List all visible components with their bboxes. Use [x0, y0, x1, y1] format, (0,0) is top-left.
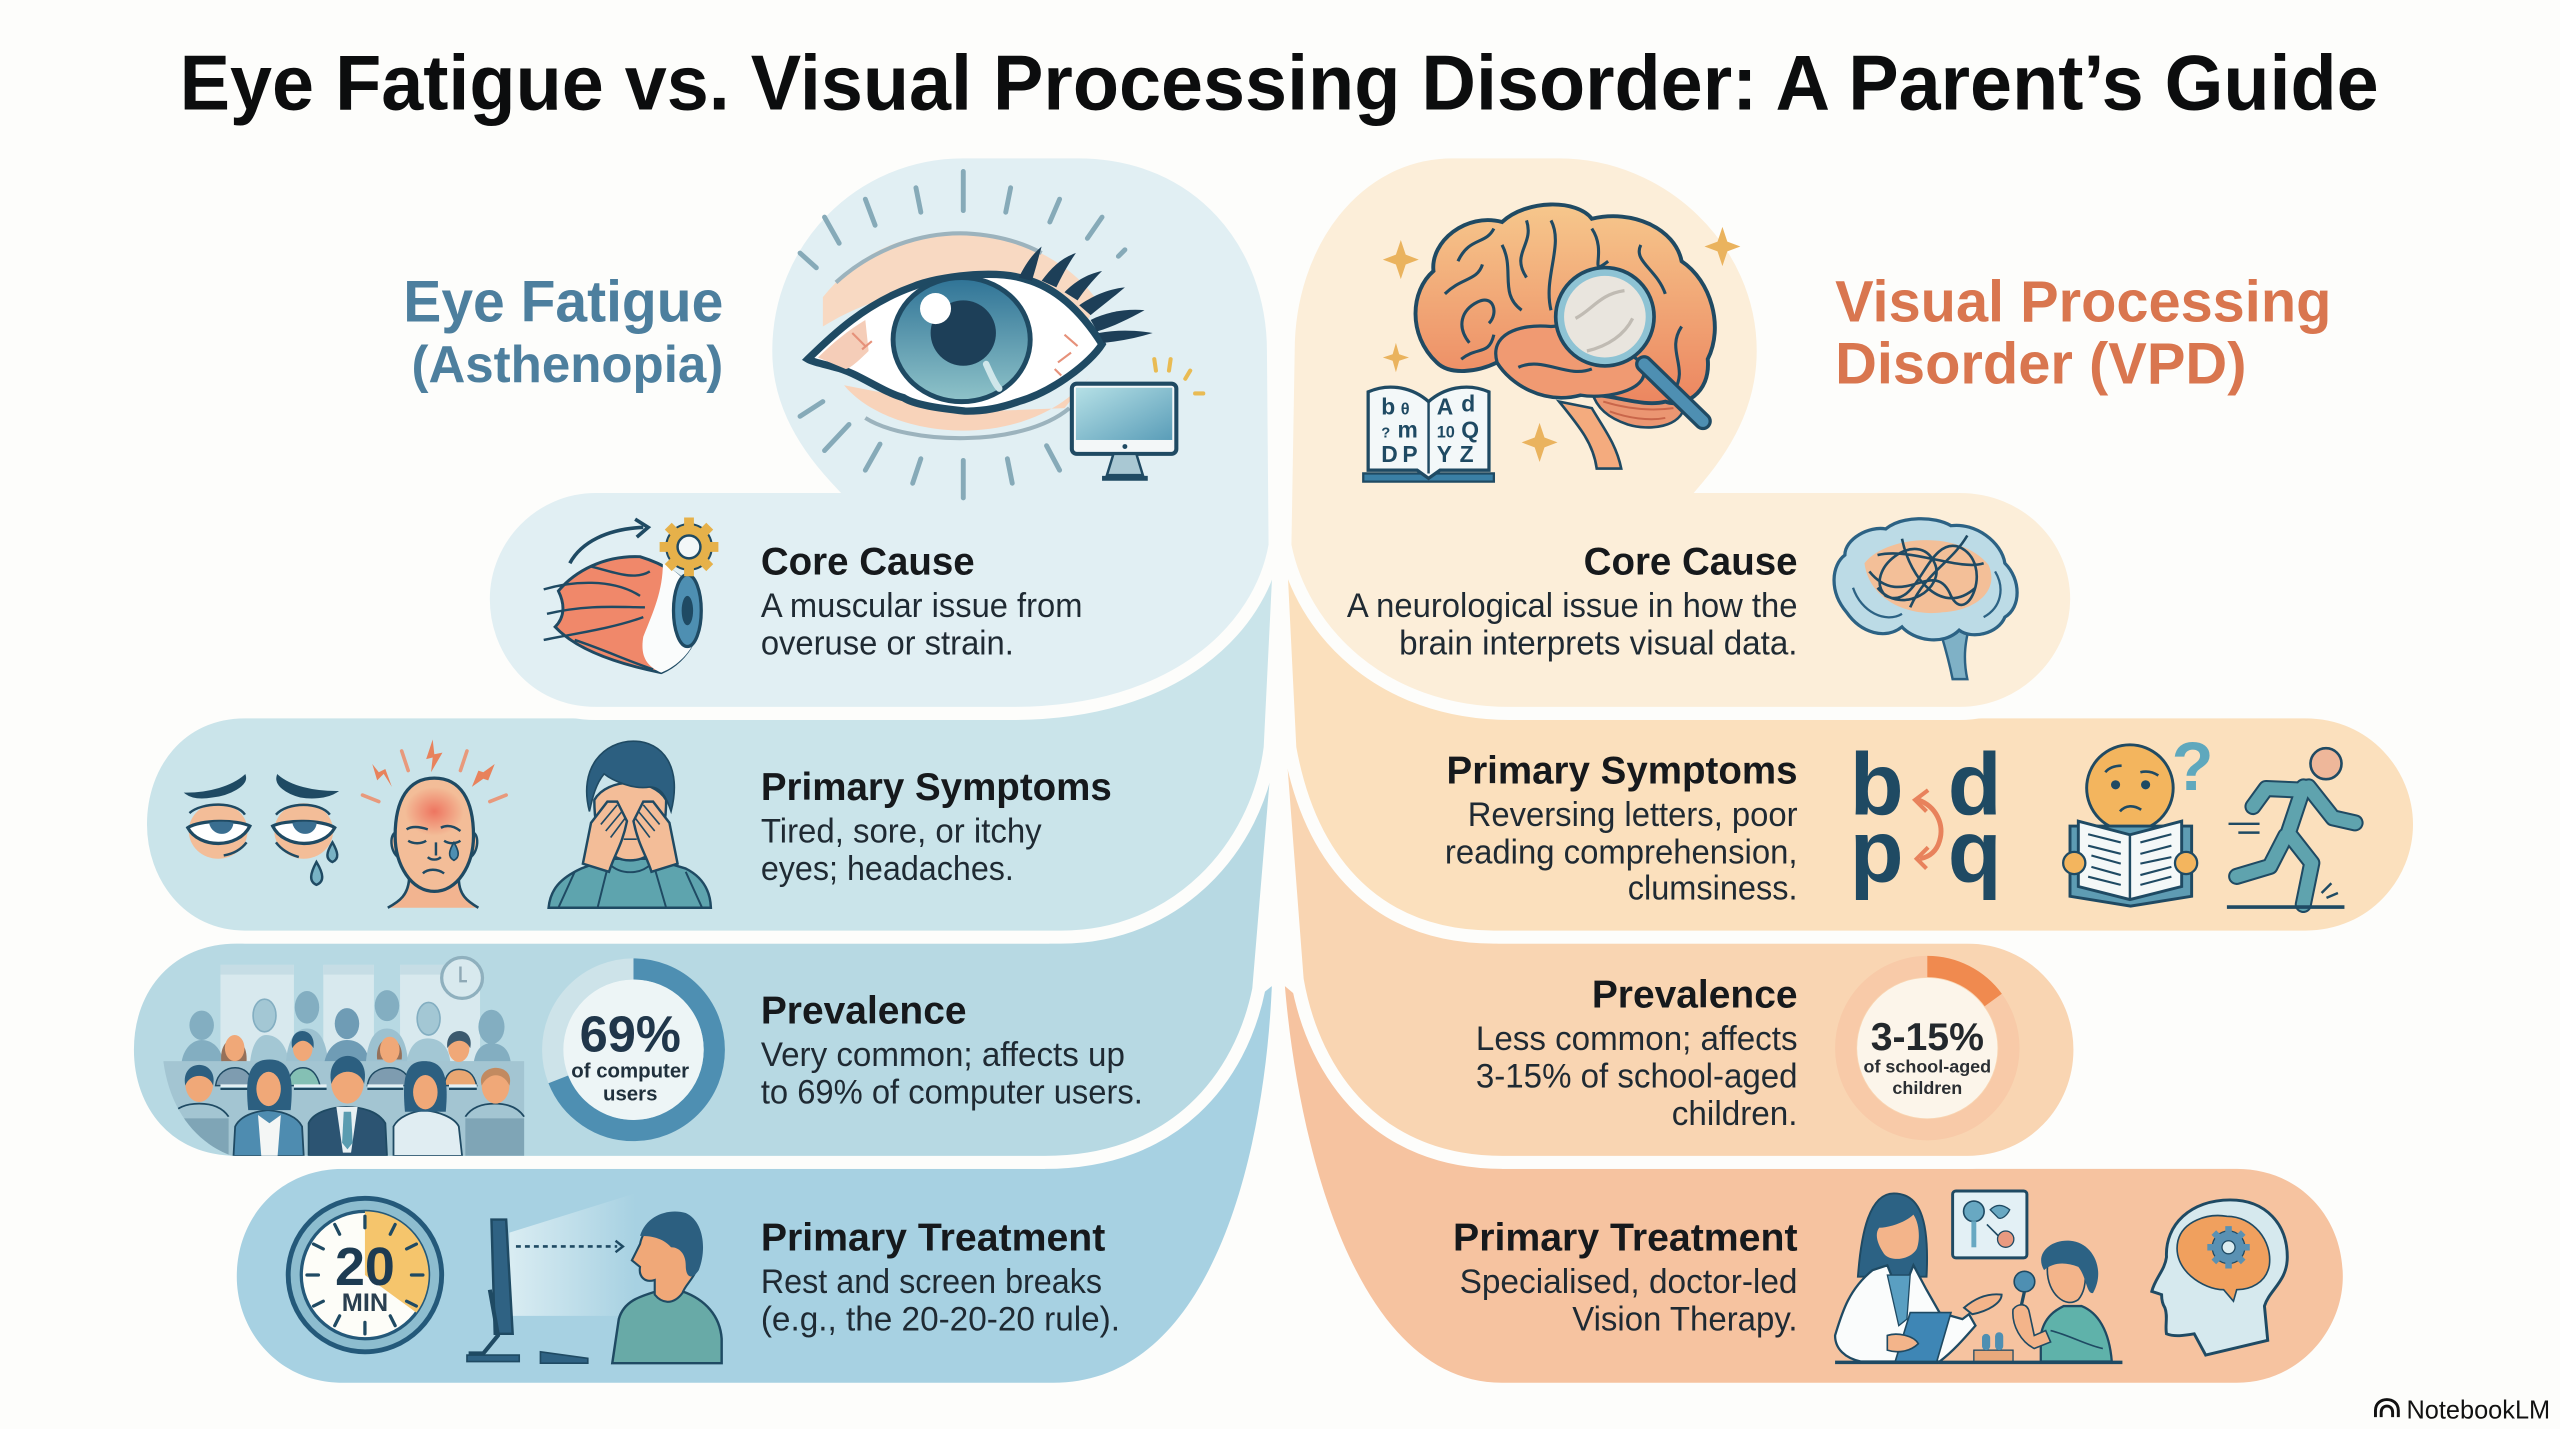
icon: open book with jumbled letters: D — [1381, 441, 1398, 467]
icon: strained eye with monitor — [800, 171, 1203, 498]
icon: confused child reading — [2063, 728, 2214, 906]
text: core cause: overuse or strain. — [761, 625, 1014, 663]
panel: eye fatigue prevalence — [127, 754, 1278, 1162]
icon: open book with jumbled letters: Z — [1460, 441, 1474, 467]
text: treatment: Primary Treatment — [1453, 1217, 1798, 1260]
icon: open book with jumbled letters: d — [1461, 390, 1475, 416]
chart: 69 percent donut: users — [603, 1083, 657, 1105]
text: core cause: A muscular issue from — [761, 587, 1082, 625]
heading: visual processing disorder: Disorder (VPD) — [1835, 332, 2246, 397]
text: symptoms — [761, 766, 1112, 888]
text: prevalence: Prevalence — [761, 990, 967, 1033]
text: symptoms: Primary Symptoms — [1447, 750, 1798, 793]
icon: person looking away from monitor — [467, 1193, 722, 1363]
panel: VPD hero and core cause — [1285, 152, 2331, 713]
panel: VPD prevalence — [1280, 754, 2080, 1162]
text: core cause: brain interprets visual data. — [1399, 625, 1798, 663]
text: prevalence: Prevalence — [1592, 973, 1798, 1016]
text: symptoms: Reversing letters, poor — [1468, 796, 1798, 834]
icon: open book with jumbled letters: 10 — [1437, 424, 1455, 442]
text: core cause: A neurological issue in how the — [1347, 587, 1798, 625]
text: treatment: Vision Therapy. — [1572, 1301, 1798, 1339]
icon: open book with jumbled letters: P — [1402, 441, 1418, 467]
heading: eye fatigue: (Asthenopia) — [411, 336, 723, 394]
text: treatment: Rest and screen breaks — [761, 1263, 1102, 1301]
heading: visual processing disorder — [1835, 270, 2331, 397]
icon: open book with jumbled letters: θ — [1401, 401, 1410, 419]
icon: strained eye muscle with gear — [544, 518, 718, 673]
icon: tired eyes — [186, 775, 337, 885]
title: Eye Fatigue vs. Visual Processing Disorder: A Parent’s Guide — [180, 38, 2379, 126]
icon: open book with jumbled letters: A — [1437, 394, 1453, 420]
icon: confused child reading: ? — [2172, 728, 2214, 805]
icon: open book with jumbled letters: Q — [1461, 417, 1479, 443]
icon: brain under magnifying glass — [1383, 204, 1740, 469]
chart: 3-15 percent donut: children — [1892, 1078, 1962, 1098]
icon: open book with jumbled letters: Y — [1437, 441, 1452, 467]
icon: reversed letters: b — [1850, 735, 1904, 834]
icon: open book with jumbled letters: m — [1398, 417, 1418, 443]
heading: eye fatigue — [403, 270, 723, 394]
chart: 3-15 percent donut: of school-aged — [1864, 1057, 1991, 1077]
text: symptoms: Tired, sore, or itchy — [761, 812, 1042, 850]
text: prevalence: children. — [1672, 1095, 1798, 1133]
icon: open book with jumbled letters: ? — [1381, 426, 1390, 442]
panel: eye fatigue primary treatment — [237, 986, 1272, 1383]
icon: headache head — [362, 740, 506, 908]
panel: eye fatigue primary symptoms — [140, 549, 1280, 937]
icon: clumsy runner — [2227, 748, 2355, 907]
text: treatment — [761, 1217, 1120, 1339]
chart: 3-15 percent donut: 3-15% — [1871, 1016, 1984, 1059]
text: symptoms — [1445, 750, 1798, 908]
chart: 3-15 percent donut — [1846, 966, 2009, 1130]
text: prevalence — [1476, 973, 1798, 1133]
icon: open book with jumbled letters: b — [1381, 394, 1395, 420]
icon: head with brain and gear — [2152, 1200, 2287, 1355]
text: symptoms: eyes; headaches. — [761, 850, 1014, 888]
icon: 20 minute timer: 20 — [335, 1237, 395, 1297]
text: treatment: Specialised, doctor-led — [1460, 1263, 1798, 1301]
heading: eye fatigue: Eye Fatigue — [403, 270, 723, 335]
panel: eye fatigue hero and core cause — [403, 152, 1275, 713]
icon: doctor with child — [1835, 1191, 2122, 1363]
text: treatment: (e.g., the 20-20-20 rule). — [761, 1301, 1120, 1339]
text: prevalence: 3-15% of school-aged — [1476, 1057, 1798, 1095]
text: core cause: Core Cause — [761, 541, 975, 584]
text: treatment — [1453, 1217, 1798, 1339]
icon: reversed letters — [1850, 735, 2002, 901]
text: core cause: Core Cause — [1584, 541, 1798, 584]
panel: VPD primary treatment — [1285, 986, 2343, 1383]
icon: tangled blue brain — [1834, 519, 2017, 679]
chart: 69 percent donut — [553, 969, 714, 1131]
panel: VPD primary symptoms — [1280, 549, 2420, 937]
icon: 20 minute timer — [288, 1198, 442, 1352]
text: prevalence: Very common; affects up — [761, 1036, 1125, 1074]
text: core cause — [761, 541, 1082, 663]
icon: open book with jumbled letters — [1363, 387, 1494, 482]
text: prevalence: to 69% of computer users. — [761, 1074, 1143, 1112]
text: core cause — [1347, 541, 1798, 663]
text: prevalence: Less common; affects — [1476, 1020, 1798, 1058]
text: symptoms: Primary Symptoms — [761, 766, 1112, 809]
icon: reversed letters: d — [1948, 735, 2002, 834]
icon: reversed letters: p — [1850, 802, 1904, 901]
chart: 69 percent donut: 69% — [580, 1005, 681, 1062]
chart: 69 percent donut: of computer — [571, 1061, 689, 1083]
icon: 20 minute timer: MIN — [342, 1289, 388, 1317]
icon: crowd of computer users — [163, 958, 524, 1156]
icon: person covering eyes — [549, 741, 711, 908]
text: prevalence — [761, 990, 1143, 1112]
text: symptoms: reading comprehension, — [1445, 834, 1798, 872]
logo: NotebookLM: NotebookLM — [2406, 1395, 2550, 1425]
text: symptoms: clumsiness. — [1628, 870, 1798, 908]
heading: visual processing disorder: Visual Processing — [1835, 270, 2331, 335]
icon: reversed letters: q — [1948, 802, 2002, 901]
text: treatment: Primary Treatment — [761, 1217, 1105, 1260]
